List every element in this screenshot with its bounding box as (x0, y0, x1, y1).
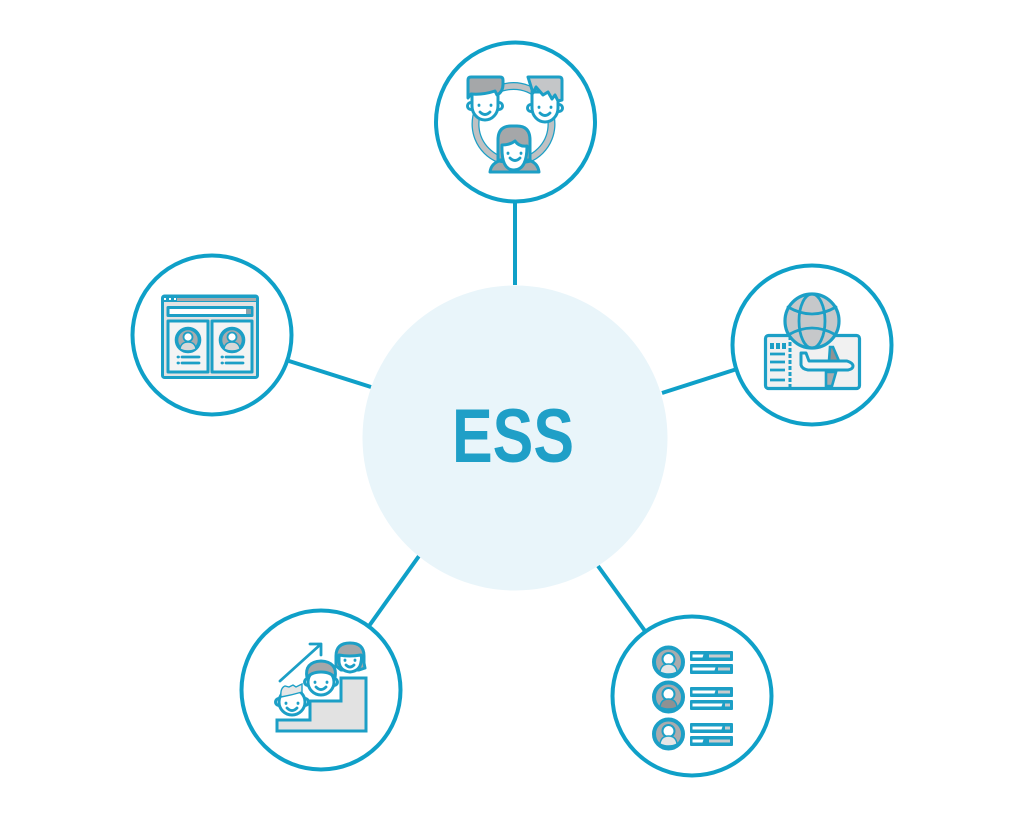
record row one (654, 648, 733, 676)
icon: employee records list (654, 648, 733, 748)
arrow (280, 644, 321, 681)
node: team circle (436, 42, 595, 202)
plane (801, 347, 853, 386)
person three (490, 126, 539, 172)
globe (785, 294, 839, 348)
hub label: ESS (452, 394, 574, 479)
stairs (277, 678, 366, 731)
ticket (766, 336, 860, 388)
central hub circle (362, 286, 668, 590)
person two (528, 77, 562, 122)
profile card left (168, 321, 208, 372)
connector: bottom right (598, 566, 645, 631)
icon: people climbing stairs (276, 643, 366, 731)
icon: globe, ticket and plane (766, 294, 860, 388)
connector: left (289, 361, 371, 387)
man with curly hair (304, 661, 338, 695)
person one (468, 77, 503, 120)
connector: bottom left (369, 556, 419, 626)
node: employee list circle (612, 616, 772, 776)
record row three (654, 720, 733, 748)
node: travel circle (732, 266, 892, 424)
boy (276, 684, 308, 715)
woman (336, 643, 365, 672)
node: profiles window circle (132, 256, 292, 414)
node: career progression circle (242, 610, 400, 770)
connector: right (662, 369, 737, 393)
profile card right (212, 321, 252, 372)
record row two (654, 682, 733, 712)
icon: browser window with two profile cards (162, 296, 258, 378)
connector: top (513, 202, 517, 285)
icon: three people around a ring (468, 77, 562, 172)
